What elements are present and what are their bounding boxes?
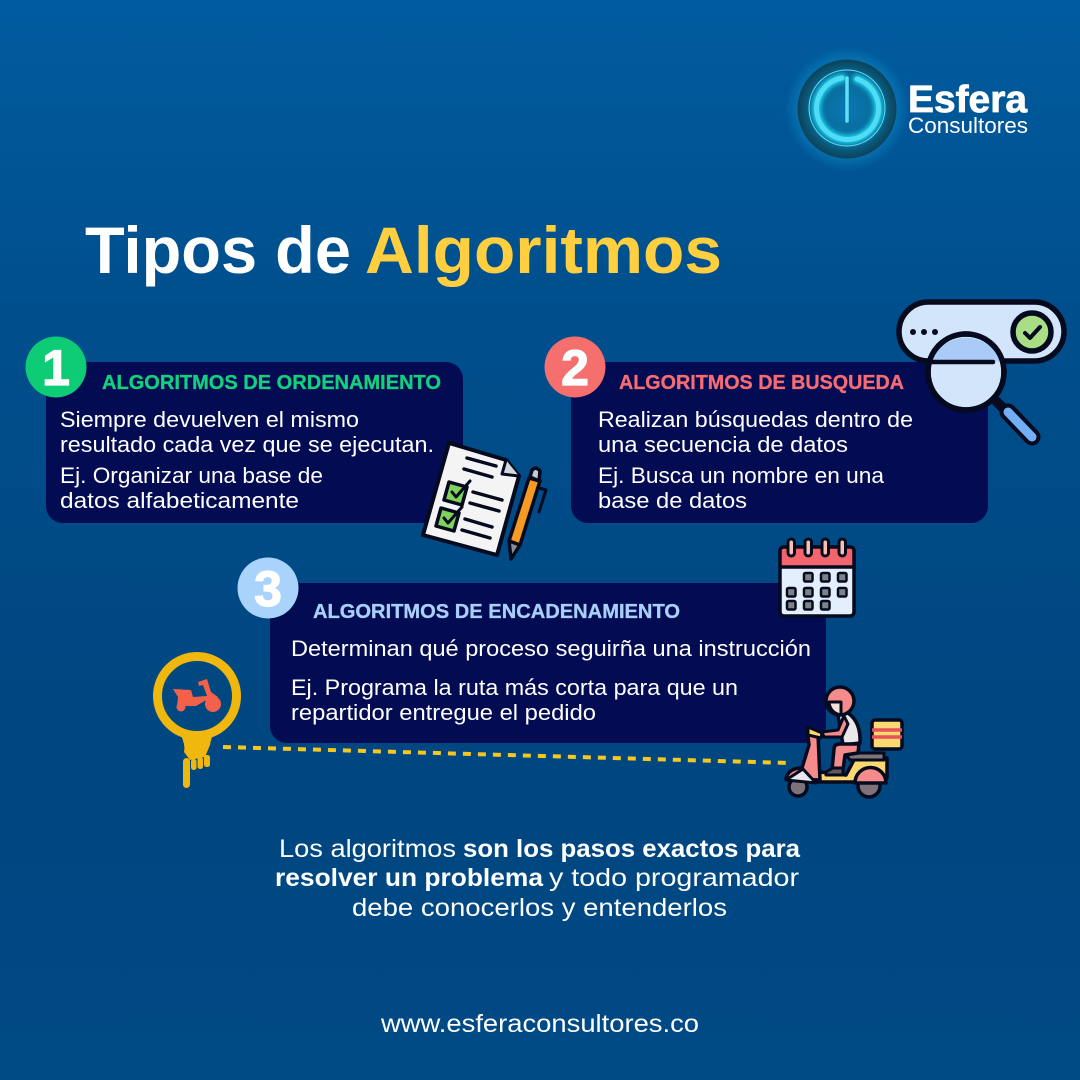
description 2: una secuencia de datos <box>598 432 848 457</box>
closing statement: y todo programador <box>549 864 799 892</box>
heading 2: ALGORITMOS DE BUSQUEDA <box>619 372 904 394</box>
description 3: Determinan qué proceso seguirña una instrucción <box>291 636 811 661</box>
description 3: Ej. Programa la ruta más corta para que un <box>291 675 738 700</box>
title: Algoritmos <box>365 213 722 287</box>
closing statement <box>275 835 801 922</box>
number badge 3: 3 <box>254 561 282 617</box>
number badge 1: 1 <box>42 340 70 396</box>
description 1: resultado cada vez que se ejecutan. <box>60 432 434 457</box>
panel: algoritmos de busqueda <box>544 336 988 523</box>
description 1: Ej. Organizar una base de <box>60 463 323 488</box>
number badge 3 <box>238 558 298 618</box>
panel: algoritmos de ordenamiento <box>26 336 463 523</box>
heading 1: ALGORITMOS DE ORDENAMIENTO <box>102 372 441 394</box>
icon: red scooter <box>173 679 221 712</box>
closing statement: Los algoritmos <box>279 835 456 863</box>
closing statement: son los pasos exactos para <box>463 835 801 863</box>
heading 3: ALGORITMOS DE ENCADENAMIENTO <box>313 601 680 623</box>
website url: www.esferaconsultores.co <box>380 1010 699 1038</box>
title <box>85 213 722 287</box>
panel: algoritmos de encadenamiento <box>238 558 826 743</box>
description 2: Realizan búsquedas dentro de <box>598 407 913 432</box>
description 3: repartidor entregue el pedido <box>291 700 596 725</box>
logo <box>785 47 1028 171</box>
icon: checklist and pen <box>423 443 546 559</box>
description 3 <box>291 636 811 725</box>
closing statement: resolver un problema <box>275 864 544 892</box>
icon: delivery scooter <box>786 687 902 797</box>
logo: Esfera <box>908 79 1028 121</box>
number badge 2: 2 <box>561 340 589 396</box>
description 1: datos alfabeticamente <box>60 488 299 513</box>
icon: map pin with hand <box>158 656 236 788</box>
closing statement: debe conocerlos y entenderlos <box>352 894 727 922</box>
icon: calendar <box>780 539 854 616</box>
logo: Consultores <box>908 113 1028 138</box>
description 2 <box>598 407 913 513</box>
description 2: Ej. Busca un nombre en una <box>598 463 885 488</box>
number badge 1 <box>26 336 86 398</box>
description 2: base de datos <box>598 488 747 513</box>
description 1: Siempre devuelven el mismo <box>60 407 359 432</box>
number badge 2 <box>544 336 606 398</box>
route dotted line <box>223 747 790 763</box>
title: Tipos de <box>85 213 351 287</box>
description 1 <box>60 407 434 513</box>
icon: search bar with magnifier <box>899 302 1064 437</box>
